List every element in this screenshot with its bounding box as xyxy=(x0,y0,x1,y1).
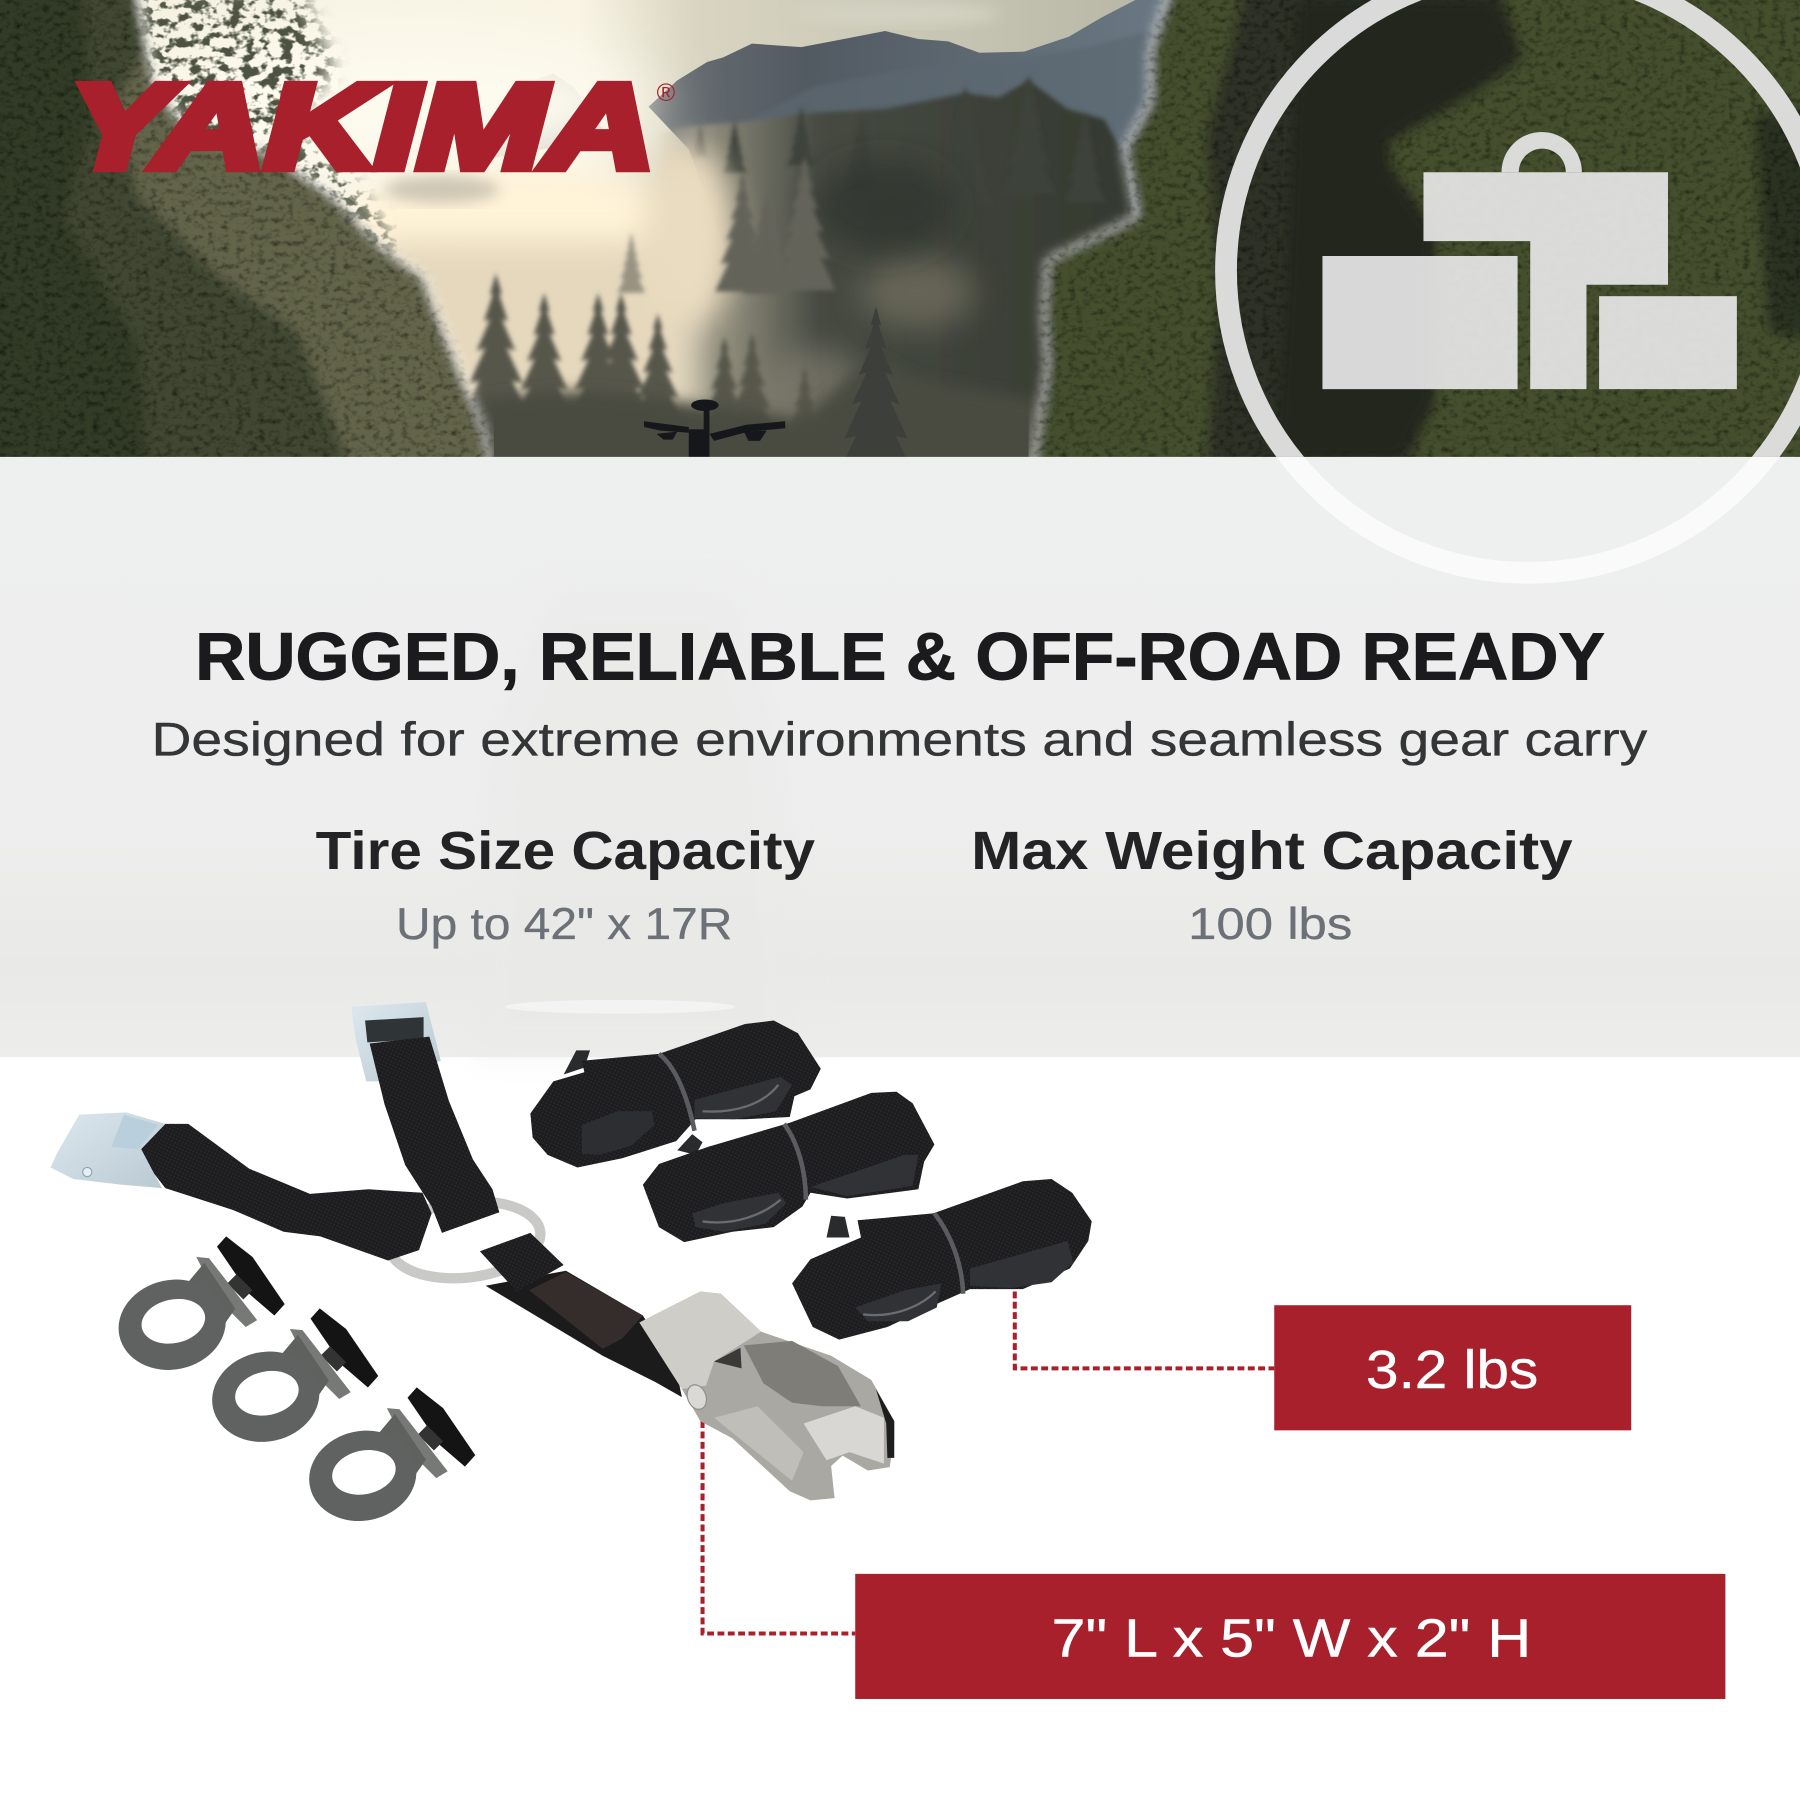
callout: dimensions xyxy=(855,1574,1725,1699)
hazy tree mass xyxy=(654,80,1136,459)
eye bolt 2 xyxy=(204,1308,378,1452)
strap bundle 2 xyxy=(643,1092,934,1242)
bike silhouette xyxy=(644,399,785,457)
callout: dimensions: 7" L x 5" W x 2" H xyxy=(1052,1609,1531,1669)
right forest xyxy=(1029,0,1800,482)
subtitle: Designed for extreme environments and seamless gear carry xyxy=(152,712,1648,765)
background photo: misty forest xyxy=(0,0,1800,482)
cam strap top xyxy=(351,1002,499,1233)
icon: cargo boxes xyxy=(1322,132,1737,389)
left forest xyxy=(0,0,494,482)
leader line: dimensions xyxy=(703,1421,855,1634)
logo: YAKIMA: ® xyxy=(657,79,676,107)
eye bolt 3 xyxy=(301,1387,475,1531)
cam strap left xyxy=(51,1112,432,1260)
clouds xyxy=(792,2,999,25)
spec: tire size capacity: Tire Size Capacity xyxy=(316,821,815,881)
mountains xyxy=(649,0,1182,276)
eye bolt 1 xyxy=(110,1236,285,1380)
logo: YAKIMA: YAKIMA xyxy=(53,61,675,194)
ratchet webbing xyxy=(480,1233,682,1397)
leader line: weight xyxy=(1015,1291,1274,1368)
spec: tire size capacity xyxy=(316,821,815,949)
info panel background xyxy=(0,457,1800,1057)
spec: max weight capacity: Max Weight Capacity xyxy=(971,821,1573,881)
foreground firs xyxy=(451,273,829,471)
sun glow and mist xyxy=(149,23,654,184)
ratchet buckle xyxy=(639,1291,894,1500)
spec: max weight capacity xyxy=(971,821,1573,949)
spec: tire size capacity: Up to 42" x 17R xyxy=(396,899,732,949)
strap bundle 1 xyxy=(530,1021,821,1167)
callout: weight xyxy=(1274,1305,1631,1430)
D ring xyxy=(386,1194,544,1285)
callout: weight: 3.2 lbs xyxy=(1366,1340,1538,1400)
product photo: strap kit xyxy=(51,1002,1092,1531)
strap bundle 3 xyxy=(792,1179,1092,1340)
sparse birch leaves xyxy=(134,0,396,298)
title: RUGGED, RELIABLE & OFF-ROAD READY xyxy=(195,621,1605,695)
misty mid firs xyxy=(618,156,836,294)
badge ring xyxy=(1226,0,1800,573)
spec: max weight capacity: 100 lbs xyxy=(1188,899,1352,949)
